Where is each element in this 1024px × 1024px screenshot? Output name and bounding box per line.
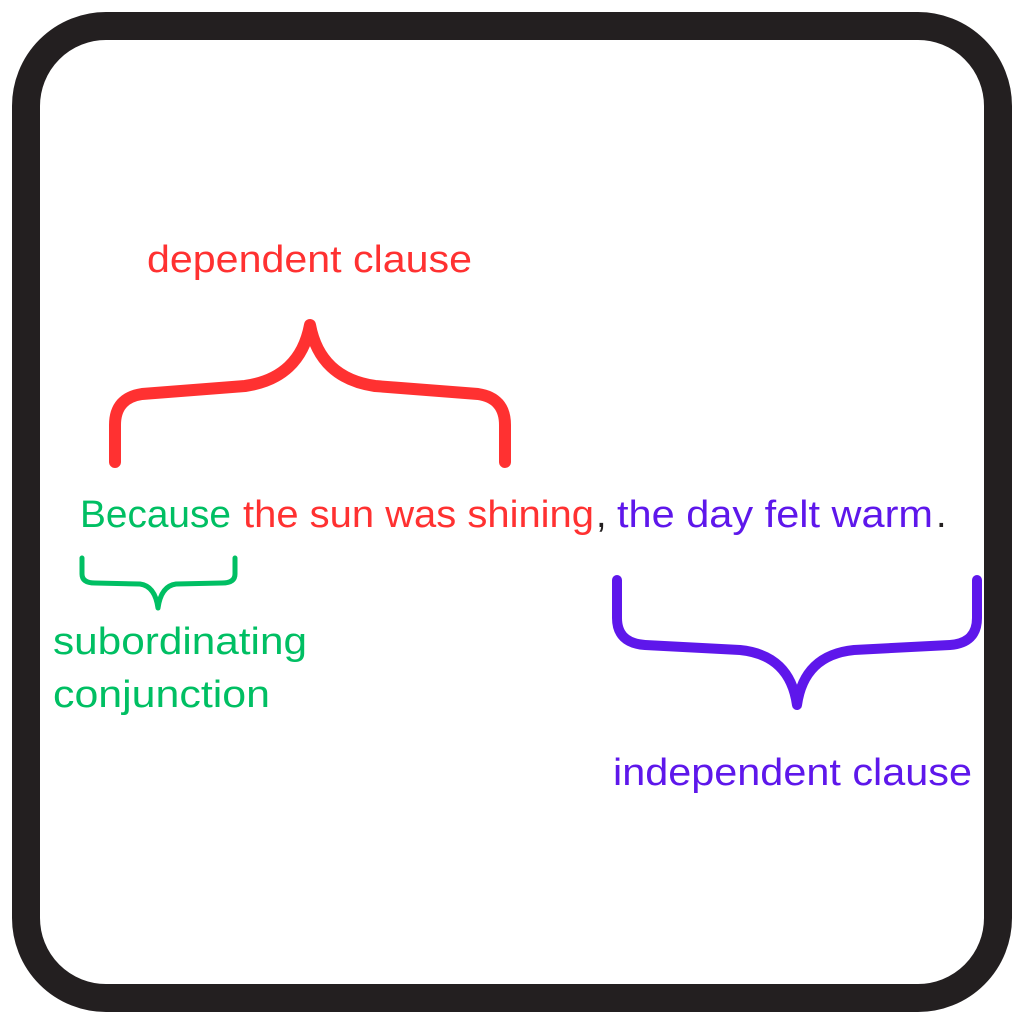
phrase: the sun was shining (red): the sun was shining [243, 494, 594, 536]
phrase: the day felt warm (purple): the day felt warm [617, 494, 933, 536]
brace: subordinating conjunction (green) [82, 558, 235, 608]
brace: dependent clause (red) [115, 325, 505, 462]
comma: , [596, 494, 607, 536]
label: dependent clause: dependent clause [147, 239, 472, 281]
word: Because (green): Because [80, 494, 231, 536]
label: subordinating conjunction: conjunction [53, 674, 270, 716]
label: subordinating conjunction [53, 621, 307, 716]
period: . [936, 494, 947, 536]
brace: independent clause (purple) [617, 580, 977, 705]
label: independent clause: independent clause [613, 752, 972, 794]
label: subordinating conjunction: subordinating [53, 621, 307, 663]
sentence [80, 494, 947, 536]
